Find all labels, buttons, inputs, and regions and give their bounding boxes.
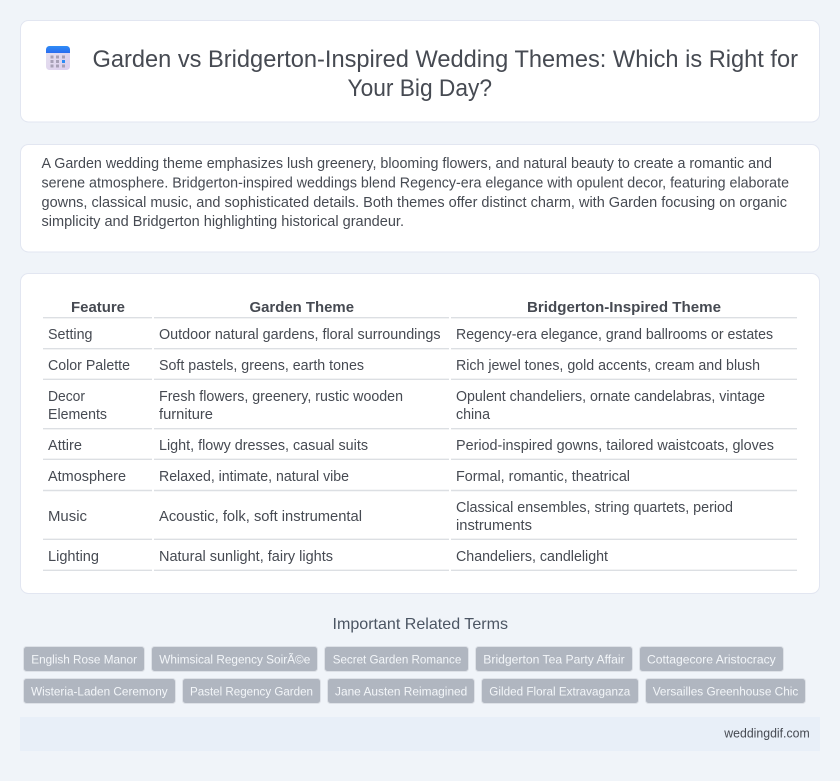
row: attire: Period-inspired gowns, tailored waistcoats, gloves — [456, 438, 774, 454]
panel: description — [20, 144, 820, 252]
tag: Cottagecore Aristocracy — [640, 646, 784, 672]
row: decor elements — [48, 389, 765, 423]
row: color palette: Color Palette — [48, 358, 130, 374]
tag: Bridgerton Tea Party Affair — [476, 646, 632, 672]
row: atmosphere: Relaxed, intimate, natural vibe — [159, 469, 349, 485]
row: color palette: Rich jewel tones, gold accents, cream and blush — [456, 358, 760, 374]
tag: Wisteria-Laden Ceremony — [24, 678, 176, 704]
row: lighting — [48, 549, 608, 565]
row: setting: Regency-era elegance, grand ballrooms or estates — [456, 327, 773, 343]
row: atmosphere — [48, 469, 630, 485]
tag: Pastel Regency Garden: Pastel Regency Garden — [190, 684, 313, 698]
row: decor elements: furniture — [159, 407, 213, 423]
tag: English Rose Manor: English Rose Manor — [31, 652, 137, 666]
tag: Secret Garden Romance: Secret Garden Romance — [333, 652, 462, 666]
row: setting — [48, 327, 773, 343]
row: color palette — [48, 358, 760, 374]
row: color palette: Soft pastels, greens, earth tones — [159, 358, 364, 374]
description text: serene atmosphere. Bridgerton-inspired weddings blend Regency-era elegance with opulent decor, featuring elaborate — [42, 176, 789, 192]
tag list: related terms — [24, 646, 806, 704]
row: music: Classical ensembles, string quartets, period — [456, 500, 733, 516]
description text: gowns, classical music, and sophisticated details. Both themes offer distinct charm, with Garden focusing on organic — [42, 195, 787, 211]
tag: Versailles Greenhouse Chic: Versailles Greenhouse Chic — [653, 684, 798, 698]
tag: Wisteria-Laden Ceremony: Wisteria-Laden Ceremony — [31, 684, 169, 698]
tag: Jane Austen Reimagined — [328, 678, 474, 704]
tag: Gilded Floral Extravaganza — [482, 678, 638, 704]
description text: A Garden wedding theme emphasizes lush greenery, blooming flowers, and natural beauty to create a romantic and — [42, 156, 772, 172]
table header row — [71, 299, 721, 316]
tag: Bridgerton Tea Party Affair: Bridgerton Tea Party Affair — [483, 652, 625, 666]
table header row: Feature — [71, 299, 125, 316]
icon: calendar — [46, 46, 70, 70]
footer bar — [20, 717, 820, 751]
row: decor elements: Decor — [48, 389, 85, 405]
row: atmosphere: Atmosphere — [48, 469, 126, 485]
row: music: Music — [48, 509, 87, 525]
title: Your Big Day? — [348, 75, 492, 102]
row: music: Acoustic, folk, soft instrumental — [159, 509, 362, 525]
tag: Versailles Greenhouse Chic — [646, 678, 806, 704]
footer site name: weddingdif.com — [723, 727, 810, 741]
row: decor elements: china — [456, 407, 490, 423]
tag: Secret Garden Romance — [324, 646, 468, 672]
row: decor elements: Fresh flowers, greenery, rustic wooden — [159, 389, 403, 405]
panel: comparison table — [20, 274, 820, 594]
tag: Gilded Floral Extravaganza: Gilded Floral Extravaganza — [489, 684, 631, 698]
row: lighting: Natural sunlight, fairy lights — [159, 549, 333, 565]
table header row: Bridgerton-Inspired Theme — [527, 299, 721, 316]
row: setting: Outdoor natural gardens, floral surroundings — [159, 327, 440, 343]
tag: Whimsical Regency Soiree — [152, 646, 318, 672]
tag: Whimsical Regency Soiree: Whimsical Regency SoirÃ©e — [159, 652, 311, 666]
title: Garden vs Bridgerton-Inspired Wedding Themes: Which is Right for — [92, 46, 798, 73]
row: music — [48, 500, 733, 534]
row: decor elements: Elements — [48, 407, 107, 423]
row: music: instruments — [456, 518, 532, 534]
row: attire — [48, 438, 774, 454]
row: setting: Setting — [48, 327, 92, 343]
heading: important related terms: Important Related Terms — [332, 616, 508, 633]
description text — [42, 156, 789, 230]
tag: Jane Austen Reimagined: Jane Austen Reimagined — [335, 684, 467, 698]
tag: Pastel Regency Garden — [182, 678, 320, 704]
row: lighting: Chandeliers, candlelight — [456, 549, 608, 565]
table header row: Garden Theme — [250, 299, 354, 316]
row: atmosphere: Formal, romantic, theatrical — [456, 469, 630, 485]
tag: English Rose Manor — [24, 646, 144, 672]
description text: simplicity and Bridgerton highlighting historical grandeur. — [42, 214, 404, 230]
row: lighting: Lighting — [48, 549, 99, 565]
row: attire: Light, flowy dresses, casual suits — [159, 438, 368, 454]
row: attire: Attire — [48, 438, 82, 454]
tag: Cottagecore Aristocracy: Cottagecore Aristocracy — [647, 652, 777, 666]
row: decor elements: Opulent chandeliers, ornate candelabras, vintage — [456, 389, 765, 405]
title — [92, 46, 798, 102]
panel: title header — [20, 20, 820, 122]
